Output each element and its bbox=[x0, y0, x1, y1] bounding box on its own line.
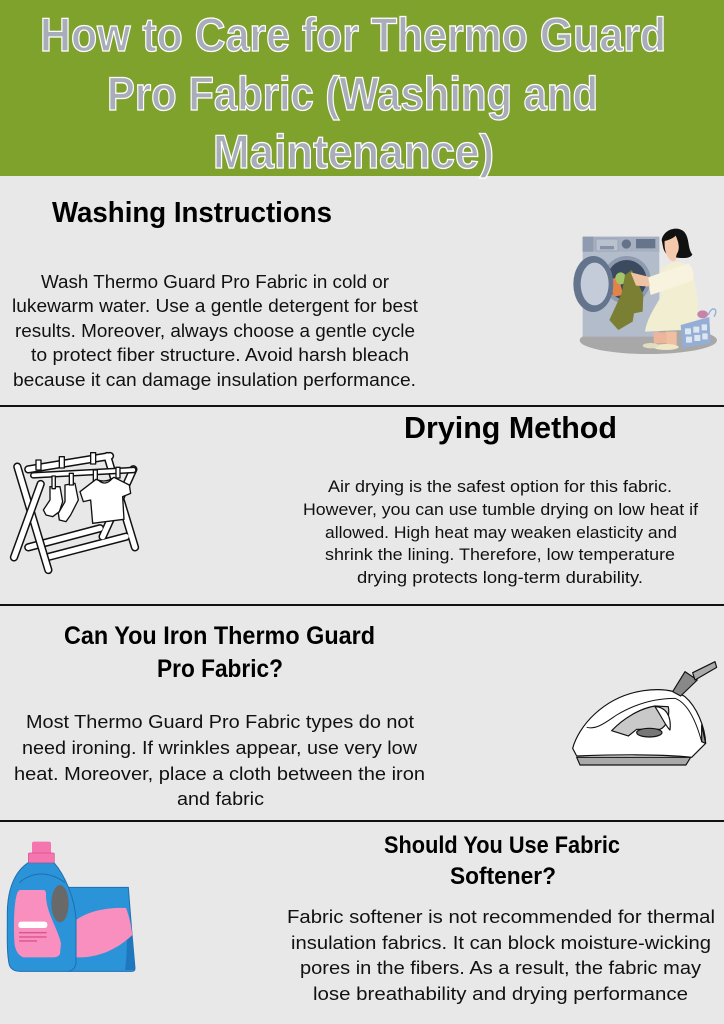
text block: fabric softener: lose breathability and drying performance bbox=[313, 984, 688, 1004]
text block: drying method: drying protects long-term durability. bbox=[357, 568, 643, 587]
text block: washing instructions: to protect fiber structure. Avoid harsh bleach bbox=[31, 345, 409, 365]
heading: washing instructions: Washing Instructions bbox=[52, 197, 332, 229]
text block: ironing: Most Thermo Guard Pro Fabric types do not bbox=[26, 712, 414, 732]
heading: can you iron: Can You Iron Thermo Guard bbox=[64, 622, 375, 650]
text block: ironing: need ironing. If wrinkles appear, use very low bbox=[22, 738, 418, 758]
text block: ironing: and fabric bbox=[177, 789, 264, 809]
heading: can you iron bbox=[64, 622, 375, 683]
text block: drying method: allowed. High heat may weaken elasticity and bbox=[325, 523, 677, 542]
panel: drying method bbox=[14, 410, 698, 587]
panel: washing instructions bbox=[12, 197, 717, 390]
text block: fabric softener: pores in the fibers. As a result, the fabric may bbox=[300, 958, 701, 978]
text block: ironing bbox=[14, 712, 425, 809]
heading: fabric softener bbox=[384, 832, 620, 890]
text block: fabric softener bbox=[287, 907, 715, 1004]
text block: drying method: shrink the lining. Therefore, low temperature bbox=[325, 545, 675, 564]
title banner bbox=[0, 0, 724, 178]
text block: fabric softener: Fabric softener is not recommended for thermal bbox=[287, 907, 715, 927]
text block: washing instructions: because it can damage insulation performance. bbox=[13, 370, 416, 390]
text block: washing instructions: results. Moreover, always choose a gentle cycle bbox=[15, 321, 415, 341]
panel: fabric softener bbox=[7, 832, 715, 1004]
heading: fabric softener: Softener? bbox=[450, 863, 556, 890]
text block: drying method: However, you can use tumble drying on low heat if bbox=[303, 500, 698, 519]
icon: iron bbox=[573, 662, 717, 765]
icon: woman at washing machine bbox=[573, 229, 717, 354]
text block: drying method bbox=[303, 477, 698, 587]
title bbox=[40, 8, 666, 178]
title: How to Care for Thermo Guard bbox=[40, 8, 666, 61]
text block: ironing: heat. Moreover, place a cloth between the iron bbox=[14, 764, 425, 784]
text block: washing instructions bbox=[12, 272, 418, 390]
text block: washing instructions: Wash Thermo Guard Pro Fabric in cold or bbox=[41, 272, 389, 292]
text block: washing instructions: lukewarm water. Use a gentle detergent for best bbox=[12, 296, 418, 316]
title: Pro Fabric (Washing and bbox=[107, 67, 598, 120]
heading: can you iron: Pro Fabric? bbox=[157, 655, 283, 683]
heading: drying method: Drying Method bbox=[404, 410, 617, 445]
heading: fabric softener: Should You Use Fabric bbox=[384, 832, 620, 859]
panel: ironing bbox=[14, 622, 717, 809]
icon: detergent bottle and pouch bbox=[7, 842, 135, 971]
text block: drying method: Air drying is the safest option for this fabric. bbox=[328, 477, 672, 496]
text block: fabric softener: insulation fabrics. It can block moisture-wicking bbox=[291, 933, 711, 953]
title: Maintenance) bbox=[213, 125, 494, 178]
icon: drying rack with clothes bbox=[14, 453, 135, 570]
